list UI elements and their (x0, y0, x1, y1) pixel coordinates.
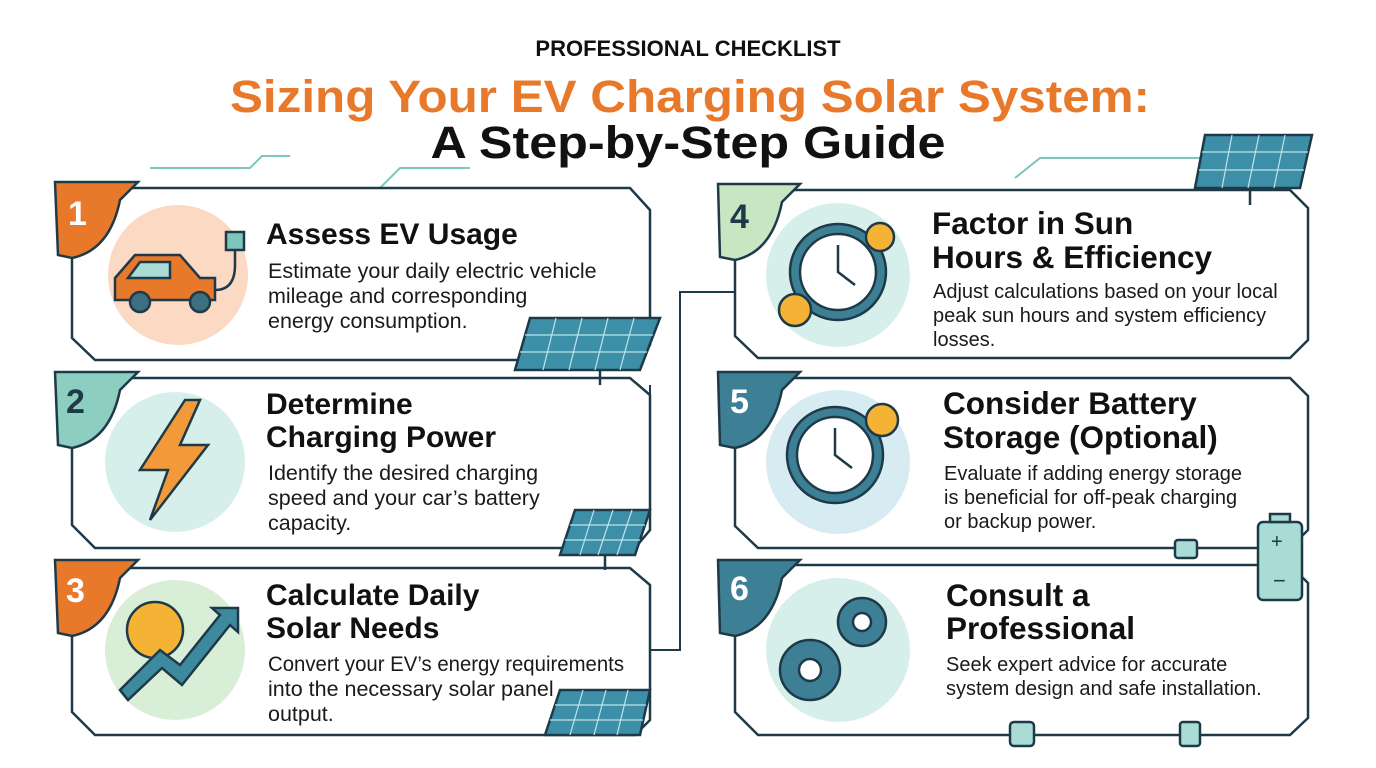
panel 3: Solar Needs (266, 612, 439, 645)
header: A Step-by-Step Guide (430, 117, 946, 168)
panel 6: Consult a (946, 577, 1090, 613)
panel 5: is beneficial for off-peak charging (944, 487, 1237, 509)
icon: battery (1258, 514, 1302, 600)
icon: bolt (140, 400, 208, 520)
panel 3: Convert your EV’s energy requirements (268, 652, 624, 676)
panel 5 (735, 378, 1308, 548)
icon: battery: − (1273, 568, 1286, 593)
panel 5: Consider Battery (943, 385, 1197, 421)
panel 1 (72, 188, 650, 360)
header: Sizing Your EV Charging Solar System: (230, 71, 1150, 122)
icon: sun arrow (120, 602, 238, 700)
panel 1: Assess EV Usage (266, 218, 518, 251)
panel 4: Adjust calculations based on your local (933, 281, 1278, 303)
badge 2: 2 (66, 383, 85, 421)
panel 6 (735, 565, 1308, 735)
panel 5: or backup power. (944, 511, 1096, 533)
panel 1: mileage and corresponding (268, 284, 527, 308)
panel 2: capacity. (268, 511, 351, 535)
panel 2: Charging Power (266, 421, 496, 454)
badge 5 (718, 372, 800, 448)
icon: plugs (1010, 540, 1200, 746)
icon: battery: + (1271, 531, 1283, 553)
panel 2: speed and your car’s battery (268, 486, 540, 510)
header (230, 36, 1150, 168)
panel 5: Evaluate if adding energy storage (944, 463, 1242, 485)
badge 1 (55, 182, 138, 258)
badge 4: 4 (730, 198, 749, 236)
panel 4 (735, 190, 1308, 358)
panel 3: Calculate Daily (266, 579, 480, 612)
panel 1: energy consumption. (268, 309, 468, 333)
panel 2 (72, 378, 650, 548)
icon: solar panels (515, 135, 1312, 735)
badge 3: 3 (66, 572, 85, 610)
badge 4 (718, 184, 800, 260)
icon: clock (779, 223, 894, 326)
badge 6 (718, 560, 800, 636)
panel 3: output. (268, 702, 334, 726)
panel 6: Seek expert advice for accurate (946, 654, 1227, 676)
panel 5: Storage (Optional) (943, 419, 1218, 455)
panel 3 (72, 568, 650, 735)
panel 3: into the necessary solar panel (268, 677, 554, 701)
badge 5: 5 (730, 383, 749, 421)
badge 1: 1 (68, 195, 87, 233)
badge 3 (55, 560, 138, 636)
badge 6: 6 (730, 570, 749, 608)
panel 4: Factor in Sun (932, 205, 1133, 241)
panel 6: system design and safe installation. (946, 678, 1262, 700)
panel 4: Hours & Efficiency (932, 239, 1213, 275)
panel 2: Identify the desired charging (268, 461, 538, 485)
panel 2: Determine (266, 388, 413, 421)
badge 2 (55, 372, 138, 448)
connector lines (640, 292, 1260, 735)
icon: car (115, 232, 244, 312)
panel 6: Professional (946, 610, 1135, 646)
panel 4: losses. (933, 329, 995, 351)
panel 4: peak sun hours and system efficiency (933, 305, 1266, 327)
panel 1: Estimate your daily electric vehicle (268, 259, 597, 283)
header: PROFESSIONAL CHECKLIST (535, 36, 841, 61)
